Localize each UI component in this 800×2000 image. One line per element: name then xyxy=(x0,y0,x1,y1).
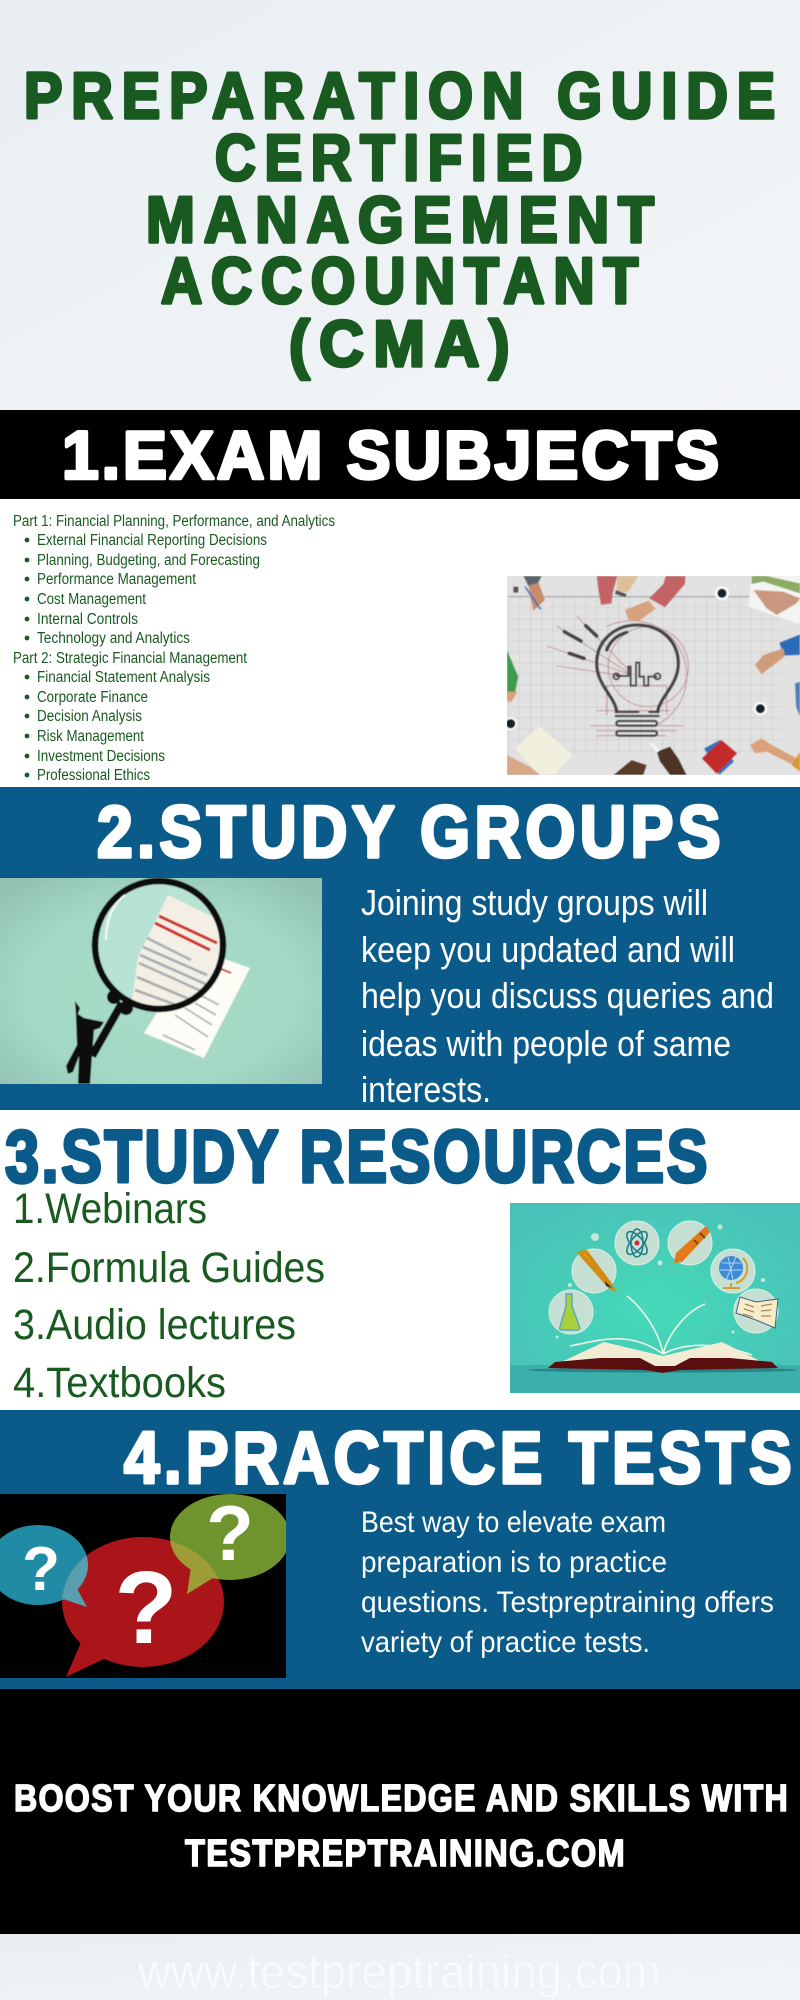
body text: practice tests: questions. Testpreptraining offers xyxy=(361,1586,774,1619)
body text: practice tests xyxy=(361,1506,774,1659)
subject list: Financial Statement Analysis xyxy=(37,669,210,686)
body text: study groups: interests. xyxy=(361,1069,491,1110)
body text: practice tests: variety of practice tests. xyxy=(361,1626,650,1659)
body text: study groups: ideas with people of same xyxy=(361,1023,731,1064)
subject list: Part 1: Financial Planning, Performance, and Analytics xyxy=(13,513,335,530)
panel: call to action xyxy=(0,1689,800,1934)
heading: exam subjects: 1.EXAM SUBJECTS xyxy=(62,418,722,494)
call to action text xyxy=(14,1778,789,1875)
title: CERTIFIED xyxy=(215,121,591,194)
body text: practice tests: Best way to elevate exam xyxy=(361,1506,666,1539)
body text: practice tests: preparation is to practice xyxy=(361,1546,667,1579)
heading: study groups: 2.STUDY GROUPS xyxy=(97,792,725,873)
body text: study groups: Joining study groups will xyxy=(361,882,708,923)
subject list: Technology and Analytics xyxy=(37,630,190,647)
subject list: Decision Analysis xyxy=(37,708,142,725)
panel: exam subjects heading band xyxy=(0,410,800,499)
illustration: question mark speech bubbles: ? xyxy=(206,1489,254,1577)
body text: study groups: keep you updated and will xyxy=(361,929,735,970)
subject list: Performance Management xyxy=(37,571,197,588)
panel: practice tests xyxy=(0,1410,800,1689)
subject list: Investment Decisions xyxy=(37,748,165,765)
subject list: Risk Management xyxy=(37,728,145,745)
panel: title header xyxy=(0,0,800,410)
subject list: Cost Management xyxy=(37,591,147,608)
subject list xyxy=(13,513,335,784)
subject list: External Financial Reporting Decisions xyxy=(37,532,267,549)
panel: study resources xyxy=(0,1110,800,1410)
subject list: Internal Controls xyxy=(37,611,138,628)
body text: study groups xyxy=(361,882,774,1110)
illustration: question mark speech bubbles: ? xyxy=(22,1535,60,1604)
resource list xyxy=(13,1185,325,1407)
subject list: Corporate Finance xyxy=(37,689,148,706)
website url: www.testpreptraining.com xyxy=(137,1946,661,1999)
resource list: 3.Audio lectures xyxy=(13,1301,296,1349)
illustration: light bulb on table with hands xyxy=(500,570,800,783)
hands xyxy=(504,576,800,775)
subject list: Part 2: Strategic Financial Management xyxy=(13,650,248,667)
title: (CMA) xyxy=(289,307,519,380)
resource list: 2.Formula Guides xyxy=(13,1244,325,1292)
panel: exam subjects xyxy=(0,499,800,787)
illustration: open book with learning icons xyxy=(510,1203,800,1393)
panel: website footer xyxy=(0,1934,800,2000)
illustration: question mark speech bubbles xyxy=(0,1489,290,1678)
title: ACCOUNTANT xyxy=(161,244,647,317)
illustration: figure holding magnifying glass over document xyxy=(0,873,327,1089)
call to action text: TESTPREPTRAINING.COM xyxy=(185,1833,626,1875)
resource list: 1.Webinars xyxy=(13,1185,207,1233)
subject list: Professional Ethics xyxy=(37,767,150,784)
title: MANAGEMENT xyxy=(146,183,663,256)
resource list: 4.Textbooks xyxy=(13,1359,226,1407)
title xyxy=(24,59,784,380)
panel: study groups xyxy=(0,787,800,1110)
subject list: Planning, Budgeting, and Forecasting xyxy=(37,552,260,569)
illustration: question mark speech bubbles: ? xyxy=(115,1550,177,1665)
